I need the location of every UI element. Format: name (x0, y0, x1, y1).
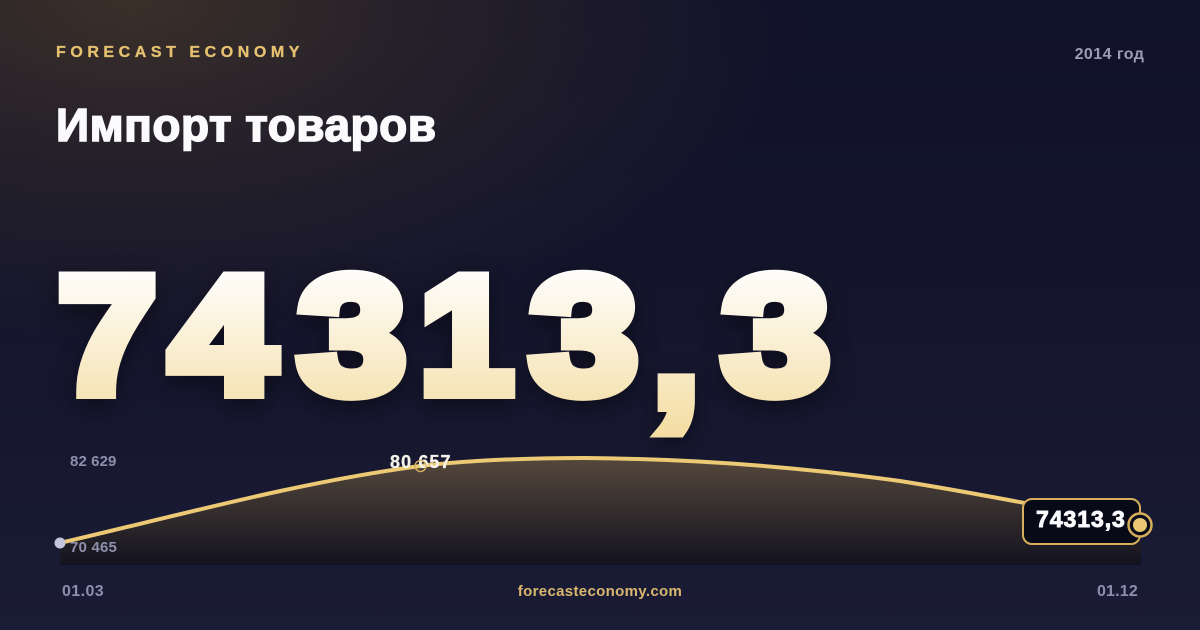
curve (60, 458, 1140, 543)
value callout (1022, 498, 1141, 545)
big value: 4 (170, 243, 275, 428)
axis max label: 82 629 (70, 453, 116, 470)
peak label: 80 657 (390, 452, 452, 472)
end date: 01.12 (1097, 583, 1138, 600)
big value: 7 (59, 244, 156, 428)
year label: 2014 год (1075, 46, 1144, 63)
big value: 3 (531, 242, 637, 427)
title: Импорт товаров (56, 99, 437, 151)
start marker (54, 538, 66, 548)
start date: 01.03 (62, 583, 104, 600)
site url: forecasteconomy.com (518, 583, 682, 600)
area under curve (60, 458, 1141, 565)
big value: 3 (299, 242, 405, 427)
value callout: 74313,3 (1036, 506, 1126, 532)
big value: 1 (420, 244, 513, 428)
big value: 3 (723, 242, 829, 427)
axis min label: 70 465 (70, 539, 117, 556)
big value: , (653, 256, 699, 440)
brand label: FORECAST ECONOMY (56, 44, 304, 61)
